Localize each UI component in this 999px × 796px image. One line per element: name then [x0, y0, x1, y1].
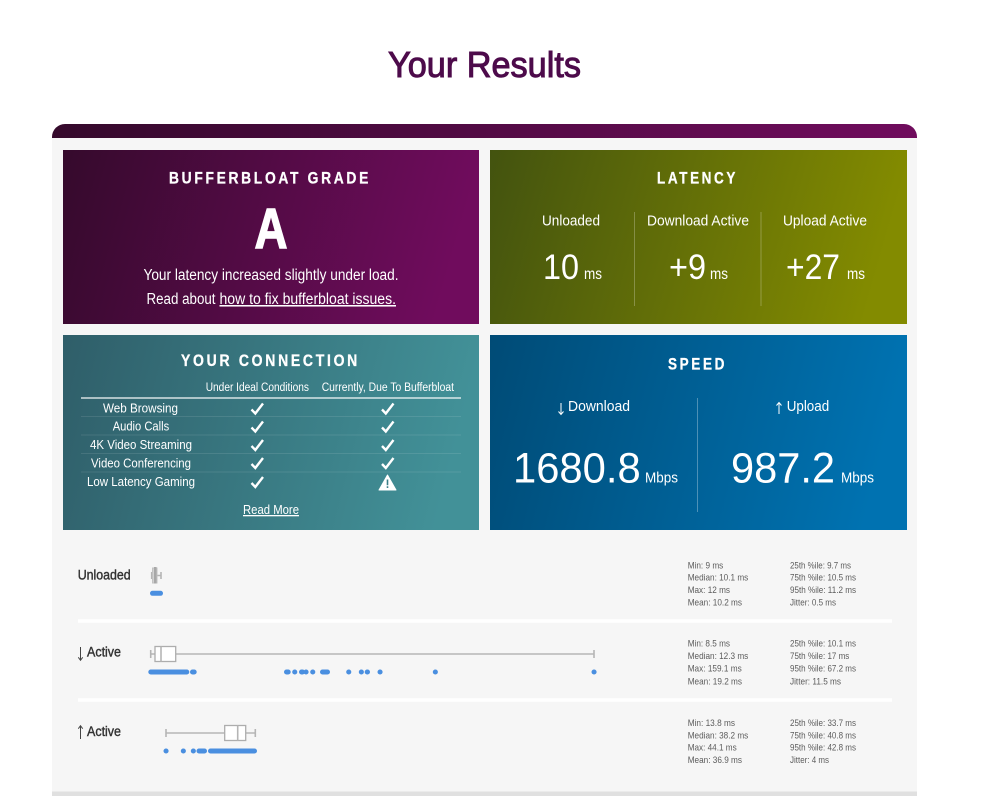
samples — [166, 748, 254, 754]
stats: 95th %ile: 42.8 ms — [790, 743, 856, 754]
stats: Min: 9 ms — [688, 560, 724, 571]
icon: up arrow — [776, 402, 782, 414]
panel: speed — [490, 335, 907, 530]
grade link text: how to fix bufferbloat issues. — [220, 291, 396, 308]
stats: Jitter: 11.5 ms — [790, 676, 841, 688]
row dividers — [78, 621, 892, 700]
metric: upload active: +27 — [786, 248, 840, 287]
heading: your connection: YOUR CONNECTION — [181, 352, 360, 370]
stats: Median: 12.3 ms — [688, 651, 749, 662]
metric: download active — [647, 212, 749, 287]
icon: warning triangle — [379, 475, 396, 490]
row labels: Audio Calls — [113, 418, 170, 434]
table header: Currently, Due To Bufferbloat — [322, 382, 455, 394]
metric: upload active — [783, 212, 867, 287]
stats: 25th %ile: 9.7 ms — [790, 560, 851, 571]
stats: 75th %ile: 17 ms — [790, 651, 850, 662]
label: Active — [87, 724, 121, 739]
panel: latency — [490, 150, 907, 324]
panel: results container — [52, 124, 917, 796]
metric: download speed: Download — [568, 398, 630, 415]
grade link text: Read about — [146, 291, 216, 308]
stats: 95th %ile: 11.2 ms — [790, 585, 856, 596]
metric: upload speed: 987.2 — [731, 445, 835, 493]
grade description: Your latency increased slightly under load. — [144, 267, 398, 284]
metric: download speed: Mbps — [645, 470, 678, 487]
box plot — [166, 726, 255, 740]
metric: upload active: Upload Active — [783, 212, 867, 230]
dividers — [634, 212, 761, 306]
stats: 95th %ile: 67.2 ms — [790, 664, 856, 674]
stats: 25th %ile: 33.7 ms — [790, 718, 856, 729]
row labels: Video Conferencing — [91, 456, 191, 470]
stats — [688, 560, 856, 608]
heading: bufferbloat grade: BUFFERBLOAT GRADE — [169, 170, 371, 188]
heading: speed: SPEED — [668, 356, 727, 374]
label: Active — [87, 645, 121, 660]
metric: upload speed: Upload — [787, 398, 829, 415]
panel: your connection — [63, 335, 479, 530]
grade link text — [146, 291, 396, 308]
icon: down arrow — [558, 403, 564, 414]
stats: 25th %ile: 10.1 ms — [790, 639, 856, 650]
stats: Min: 8.5 ms — [688, 639, 730, 650]
stats — [688, 718, 856, 766]
table header — [206, 382, 455, 394]
stats: Jitter: 4 ms — [790, 755, 829, 766]
stats: Jitter: 0.5 ms — [790, 598, 836, 608]
divider — [696, 398, 698, 512]
stats: Mean: 19.2 ms — [688, 676, 742, 688]
box plot — [152, 567, 161, 584]
panel: bufferbloat grade — [63, 150, 479, 324]
row labels: 4K Video Streaming — [90, 437, 192, 452]
metric: download active: Download Active — [647, 212, 749, 230]
samples — [151, 670, 594, 674]
row labels: Low Latency Gaming — [87, 474, 195, 489]
grade letter: A — [254, 197, 288, 261]
metric: unloaded — [542, 212, 602, 287]
metric: unloaded: 10 — [543, 248, 579, 287]
stats — [688, 639, 856, 688]
table rules — [81, 397, 461, 472]
stats: Median: 10.1 ms — [688, 573, 749, 584]
stats: Max: 159.1 ms — [688, 664, 742, 674]
label: Unloaded — [78, 568, 131, 582]
stats: Min: 13.8 ms — [688, 718, 735, 729]
row labels — [87, 400, 195, 489]
heading: latency: LATENCY — [657, 170, 738, 188]
metric: download active: +9 — [669, 248, 706, 287]
stats: Median: 38.2 ms — [688, 730, 749, 741]
metric: unloaded: Unloaded — [542, 212, 600, 230]
box plot — [151, 646, 594, 662]
stats: Mean: 36.9 ms — [688, 755, 742, 766]
stats: Mean: 10.2 ms — [688, 598, 742, 608]
metric: unloaded: ms — [584, 266, 602, 283]
samples — [152, 591, 160, 596]
metric: upload speed — [731, 398, 874, 493]
table header: Under Ideal Conditions — [206, 382, 309, 394]
stats: Max: 12 ms — [688, 585, 730, 596]
title: Your Results — [388, 44, 581, 85]
row: download active — [78, 639, 856, 688]
row labels: Web Browsing — [103, 400, 178, 416]
stats: 75th %ile: 10.5 ms — [790, 573, 856, 584]
stats: Max: 44.1 ms — [688, 743, 737, 754]
row: unloaded — [78, 560, 856, 608]
read more link: Read More — [243, 502, 299, 517]
metric: upload speed: Mbps — [841, 470, 874, 487]
metric: upload active: ms — [847, 266, 865, 283]
metric: download speed — [513, 398, 678, 493]
row: upload active — [78, 718, 856, 766]
icons: check marks — [252, 404, 394, 487]
metric: download speed: 1680.8 — [513, 445, 641, 493]
stats: 75th %ile: 40.8 ms — [790, 730, 856, 741]
metric: download active: ms — [710, 266, 728, 283]
